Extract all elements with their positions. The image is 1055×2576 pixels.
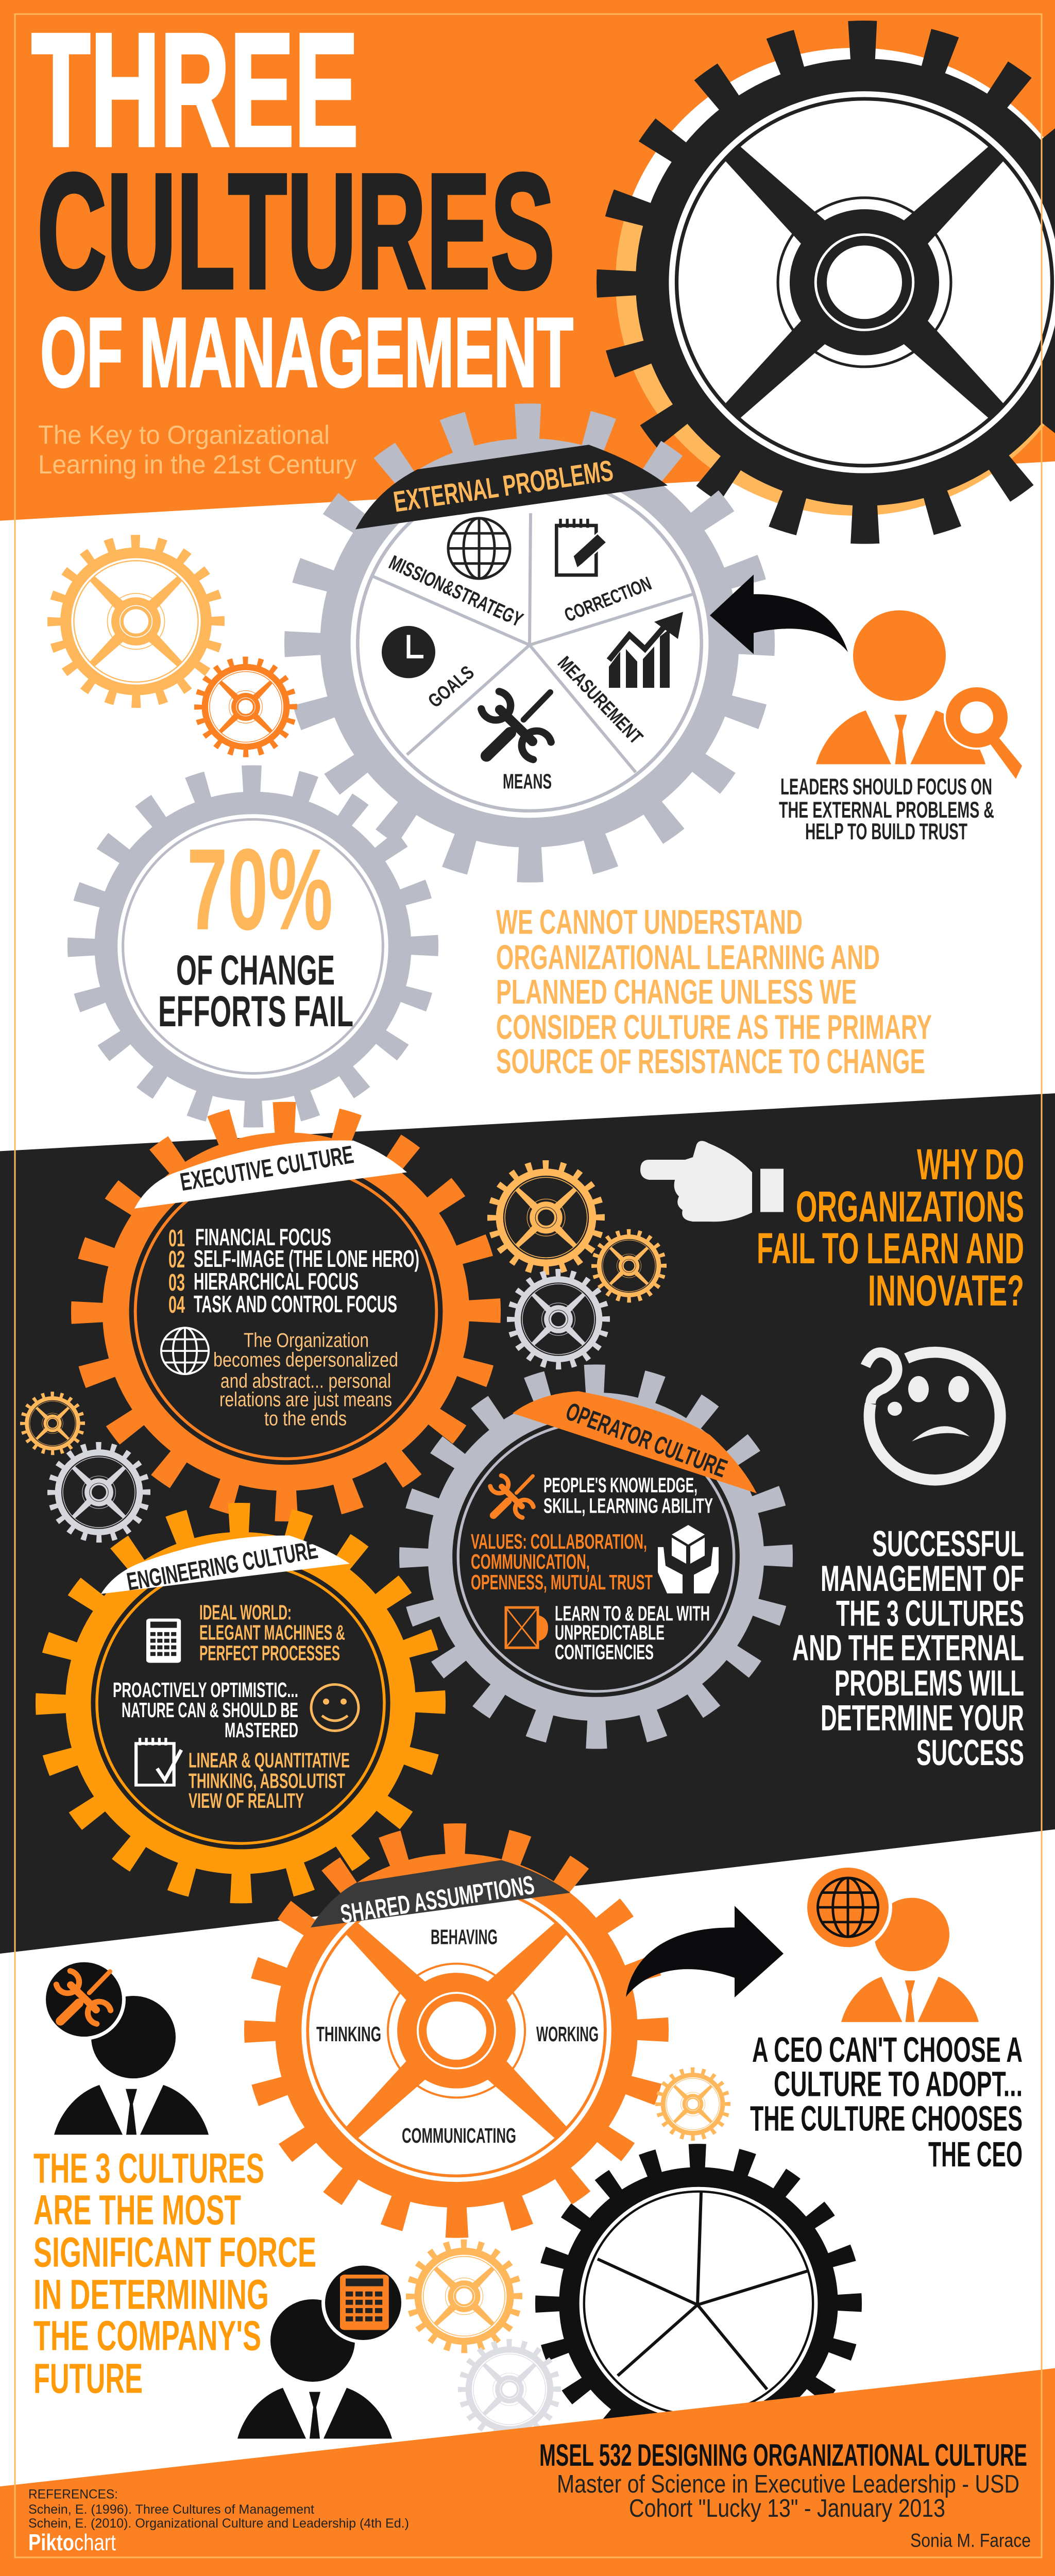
- footer orange band: [0, 2368, 1055, 2576]
- text: linear thinking: LINEAR & QUANTITATIVE: [189, 1748, 350, 1772]
- text: three cultures significant force: THE COMPANY'S: [33, 2312, 261, 2359]
- small gear: pale grey lower: [462, 2343, 557, 2436]
- numbered list: 03: [168, 1269, 185, 1296]
- footer: references: [28, 2487, 409, 2531]
- text: proactively optimistic: PROACTIVELY OPTIMISTIC...: [113, 1677, 298, 1702]
- text: linear thinking: [189, 1748, 350, 1812]
- text: successful management: [792, 1524, 1024, 1773]
- banner: engineering culture: [101, 1535, 350, 1596]
- title: OF MANAGEMENT: [40, 298, 573, 408]
- numbered list: SELF-IMAGE (THE LONE HERO): [194, 1245, 419, 1272]
- gear body: engineering: [52, 1518, 430, 1888]
- footer: author: Sonia M. Farace: [910, 2530, 1031, 2551]
- person: black with tools: [42, 1959, 209, 2135]
- text: organization depersonalized: to the ends: [264, 1408, 347, 1430]
- subtitle: Learning in the 21st Century: [38, 450, 356, 479]
- icon: white globe: [161, 1328, 209, 1374]
- text: a ceo can't choose: [750, 2030, 1023, 2174]
- small gear: light orange near ceo text: [658, 2070, 727, 2138]
- external problems gear: [303, 422, 756, 864]
- small gear: light orange lower: [411, 2244, 518, 2349]
- text: leaders should focus: [779, 773, 994, 844]
- gear body: operator: [414, 1379, 778, 1734]
- text: organization depersonalized: The Organization: [244, 1329, 369, 1351]
- text: organizational learning statement: [496, 903, 932, 1081]
- numbered list: 01: [168, 1225, 185, 1251]
- text: ideal world: IDEAL WORLD:: [199, 1600, 292, 1624]
- title: THREE: [31, 1, 359, 180]
- banner: engineering culture: ENGINEERING CULTURE: [125, 1536, 320, 1596]
- text: linear thinking: VIEW OF REALITY: [189, 1788, 304, 1812]
- banner: shared assumptions: [311, 1860, 570, 1929]
- numbered list: HIERARCHICAL FOCUS: [194, 1268, 359, 1295]
- heading: why do organizations fail: [757, 1141, 1024, 1315]
- large black hub gear: [617, 41, 1055, 524]
- text: proactively optimistic: MASTERED: [225, 1718, 298, 1742]
- numbered list: 04: [168, 1291, 185, 1318]
- text: organization depersonalized: and abstract... personal: [220, 1370, 391, 1392]
- footer: references: REFERENCES:: [28, 2487, 118, 2502]
- person: ceo with globe: [804, 1864, 979, 2022]
- small gear cluster: dark section left: [23, 1394, 146, 1539]
- gear body: external problems: [303, 422, 756, 864]
- labels: behaviours: COMMUNICATING: [402, 2124, 516, 2147]
- icon: confused sad face: [865, 1352, 1000, 1480]
- stat caption: EFFORTS FAIL: [158, 988, 353, 1036]
- gear shadow disc: [616, 48, 1055, 516]
- text: values: COMMUNICATION,: [471, 1549, 590, 1573]
- text: three cultures significant force: [33, 2144, 316, 2402]
- banner: operator culture: OPERATOR CULTURE: [562, 1397, 731, 1483]
- text: knowledge: SKILL, LEARNING ABILITY: [543, 1494, 713, 1517]
- footer: references: Schein, E. (2010). Organizational Culture and Leadership (4th Ed.): [28, 2517, 409, 2531]
- pie labels: MISSION&STRATEGY: [385, 551, 526, 631]
- icon: clock: [382, 626, 435, 678]
- 70 percent gear: [82, 779, 424, 1113]
- small gear: light orange: [54, 541, 218, 701]
- small gear cluster: dark section right: [492, 1165, 663, 1366]
- banner: executive culture: [134, 1141, 407, 1209]
- labels: behaviours: WORKING: [536, 2022, 599, 2046]
- gear body: shared assumptions: [261, 1839, 652, 2222]
- pie labels: CORRECTION: [561, 572, 654, 626]
- footer: references: Schein, E. (1996). Three Cultures of Management: [28, 2502, 314, 2517]
- subtitle: The Key to Organizational: [38, 420, 330, 449]
- pie labels: GOALS: [423, 662, 478, 711]
- operator culture gear: [414, 1379, 778, 1734]
- text: three cultures significant force: IN DETERMINING: [33, 2270, 269, 2318]
- icon: smiley: [311, 1685, 359, 1731]
- text: learn to deal: UNPREDICTABLE: [555, 1620, 665, 1645]
- text: values: OPENNESS, MUTUAL TRUST: [471, 1570, 653, 1594]
- icon: pointing hand: [640, 1141, 784, 1222]
- arrow: to external problems: [710, 574, 848, 654]
- banner: external problems: EXTERNAL PROBLEMS: [392, 454, 616, 518]
- footer: program details: [557, 2470, 1019, 2522]
- banner: executive culture: EXECUTIVE CULTURE: [178, 1141, 355, 1196]
- text: linear thinking: THINKING, ABSOLUTIST: [189, 1769, 345, 1793]
- text: organization depersonalized: relations are just means: [219, 1388, 392, 1411]
- stat: 70%: 70%: [187, 825, 333, 954]
- icon: wrench and screwdriver: [481, 691, 551, 759]
- text: three cultures significant force: SIGNIFICANT FORCE: [33, 2228, 316, 2276]
- text: knowledge: PEOPLE'S KNOWLEDGE,: [543, 1473, 697, 1497]
- text: proactively optimistic: [113, 1677, 298, 1742]
- icon: growth chart: [609, 612, 683, 688]
- stat caption: OF CHANGE: [176, 946, 335, 994]
- shared assumptions gear: [261, 1839, 652, 2222]
- arrow: to ceo: [626, 1906, 784, 1997]
- executive culture gear: [88, 1118, 484, 1505]
- pie dividers: [373, 513, 693, 772]
- footer: piktochart logo: Piktochart: [28, 2530, 116, 2555]
- gear body: 70 percent: [82, 779, 424, 1113]
- text: organization depersonalized: becomes depersonalized: [213, 1349, 398, 1371]
- text: values: [471, 1529, 653, 1594]
- icon: hands holding cube: [658, 1525, 719, 1594]
- numbered list: 02: [168, 1246, 185, 1273]
- gear body: executive: [88, 1118, 484, 1505]
- icon: calculator: [146, 1619, 181, 1663]
- labels: behaviours: BEHAVING: [431, 1925, 498, 1948]
- stat caption: [158, 946, 353, 1036]
- text: learn to deal: [555, 1601, 710, 1664]
- text: organizational learning statement: PLANNED CHANGE UNLESS WE: [496, 973, 857, 1011]
- text: ideal world: [199, 1600, 345, 1665]
- subtitle: [38, 420, 356, 479]
- text: learn to deal: CONTIGENCIES: [555, 1640, 654, 1664]
- text: learn to deal: LEARN TO & DEAL WITH: [555, 1601, 710, 1625]
- text: three cultures significant force: FUTURE: [33, 2354, 143, 2402]
- pie labels: MEANS: [503, 769, 552, 793]
- person: leader with magnifier: [816, 611, 1022, 779]
- footer: program details: Cohort "Lucky 13" - January 2013: [629, 2494, 945, 2522]
- banner: external problems: [355, 445, 668, 529]
- banner: operator culture: [513, 1391, 757, 1493]
- text: knowledge: [543, 1473, 713, 1517]
- pie labels: [385, 551, 654, 793]
- labels: behaviours: THINKING: [316, 2022, 381, 2046]
- text: three cultures significant force: THE 3 CULTURES: [33, 2144, 264, 2192]
- pie labels: MEASUREMENT: [554, 652, 647, 748]
- header orange band: [0, 0, 1055, 521]
- dark middle band: [0, 1093, 1055, 1954]
- numbered list: [168, 1224, 419, 1318]
- text: organizational learning statement: WE CANNOT UNDERSTAND: [496, 903, 803, 941]
- title: [31, 1, 573, 408]
- icon: globe: [448, 518, 510, 579]
- text: ideal world: ELEGANT MACHINES &: [199, 1620, 345, 1645]
- numbered list: TASK AND CONTROL FOCUS: [194, 1291, 397, 1317]
- icon: orange tools: [490, 1476, 533, 1518]
- text: organization depersonalized: [213, 1329, 398, 1430]
- text: ideal world: PERFECT PROCESSES: [199, 1641, 340, 1665]
- person: black with calculator: [237, 2262, 405, 2438]
- text: proactively optimistic: NATURE CAN & SHOULD BE: [122, 1698, 298, 1722]
- black pie gear: [548, 2156, 849, 2450]
- numbered list: FINANCIAL FOCUS: [195, 1224, 331, 1250]
- icon: notebook with pen: [556, 519, 607, 575]
- small gear: orange: [198, 660, 293, 753]
- labels: behaviours: [316, 1925, 599, 2147]
- engineering culture gear: [52, 1518, 430, 1888]
- icon: checklist notepad: [136, 1738, 181, 1785]
- text: values: VALUES: COLLABORATION,: [471, 1529, 647, 1553]
- icon: unpredictability box: [506, 1607, 548, 1648]
- text: three cultures significant force: ARE THE MOST: [33, 2186, 241, 2233]
- title: CULTURES: [37, 140, 555, 323]
- banner: shared assumptions: SHARED ASSUMPTIONS: [338, 1870, 536, 1929]
